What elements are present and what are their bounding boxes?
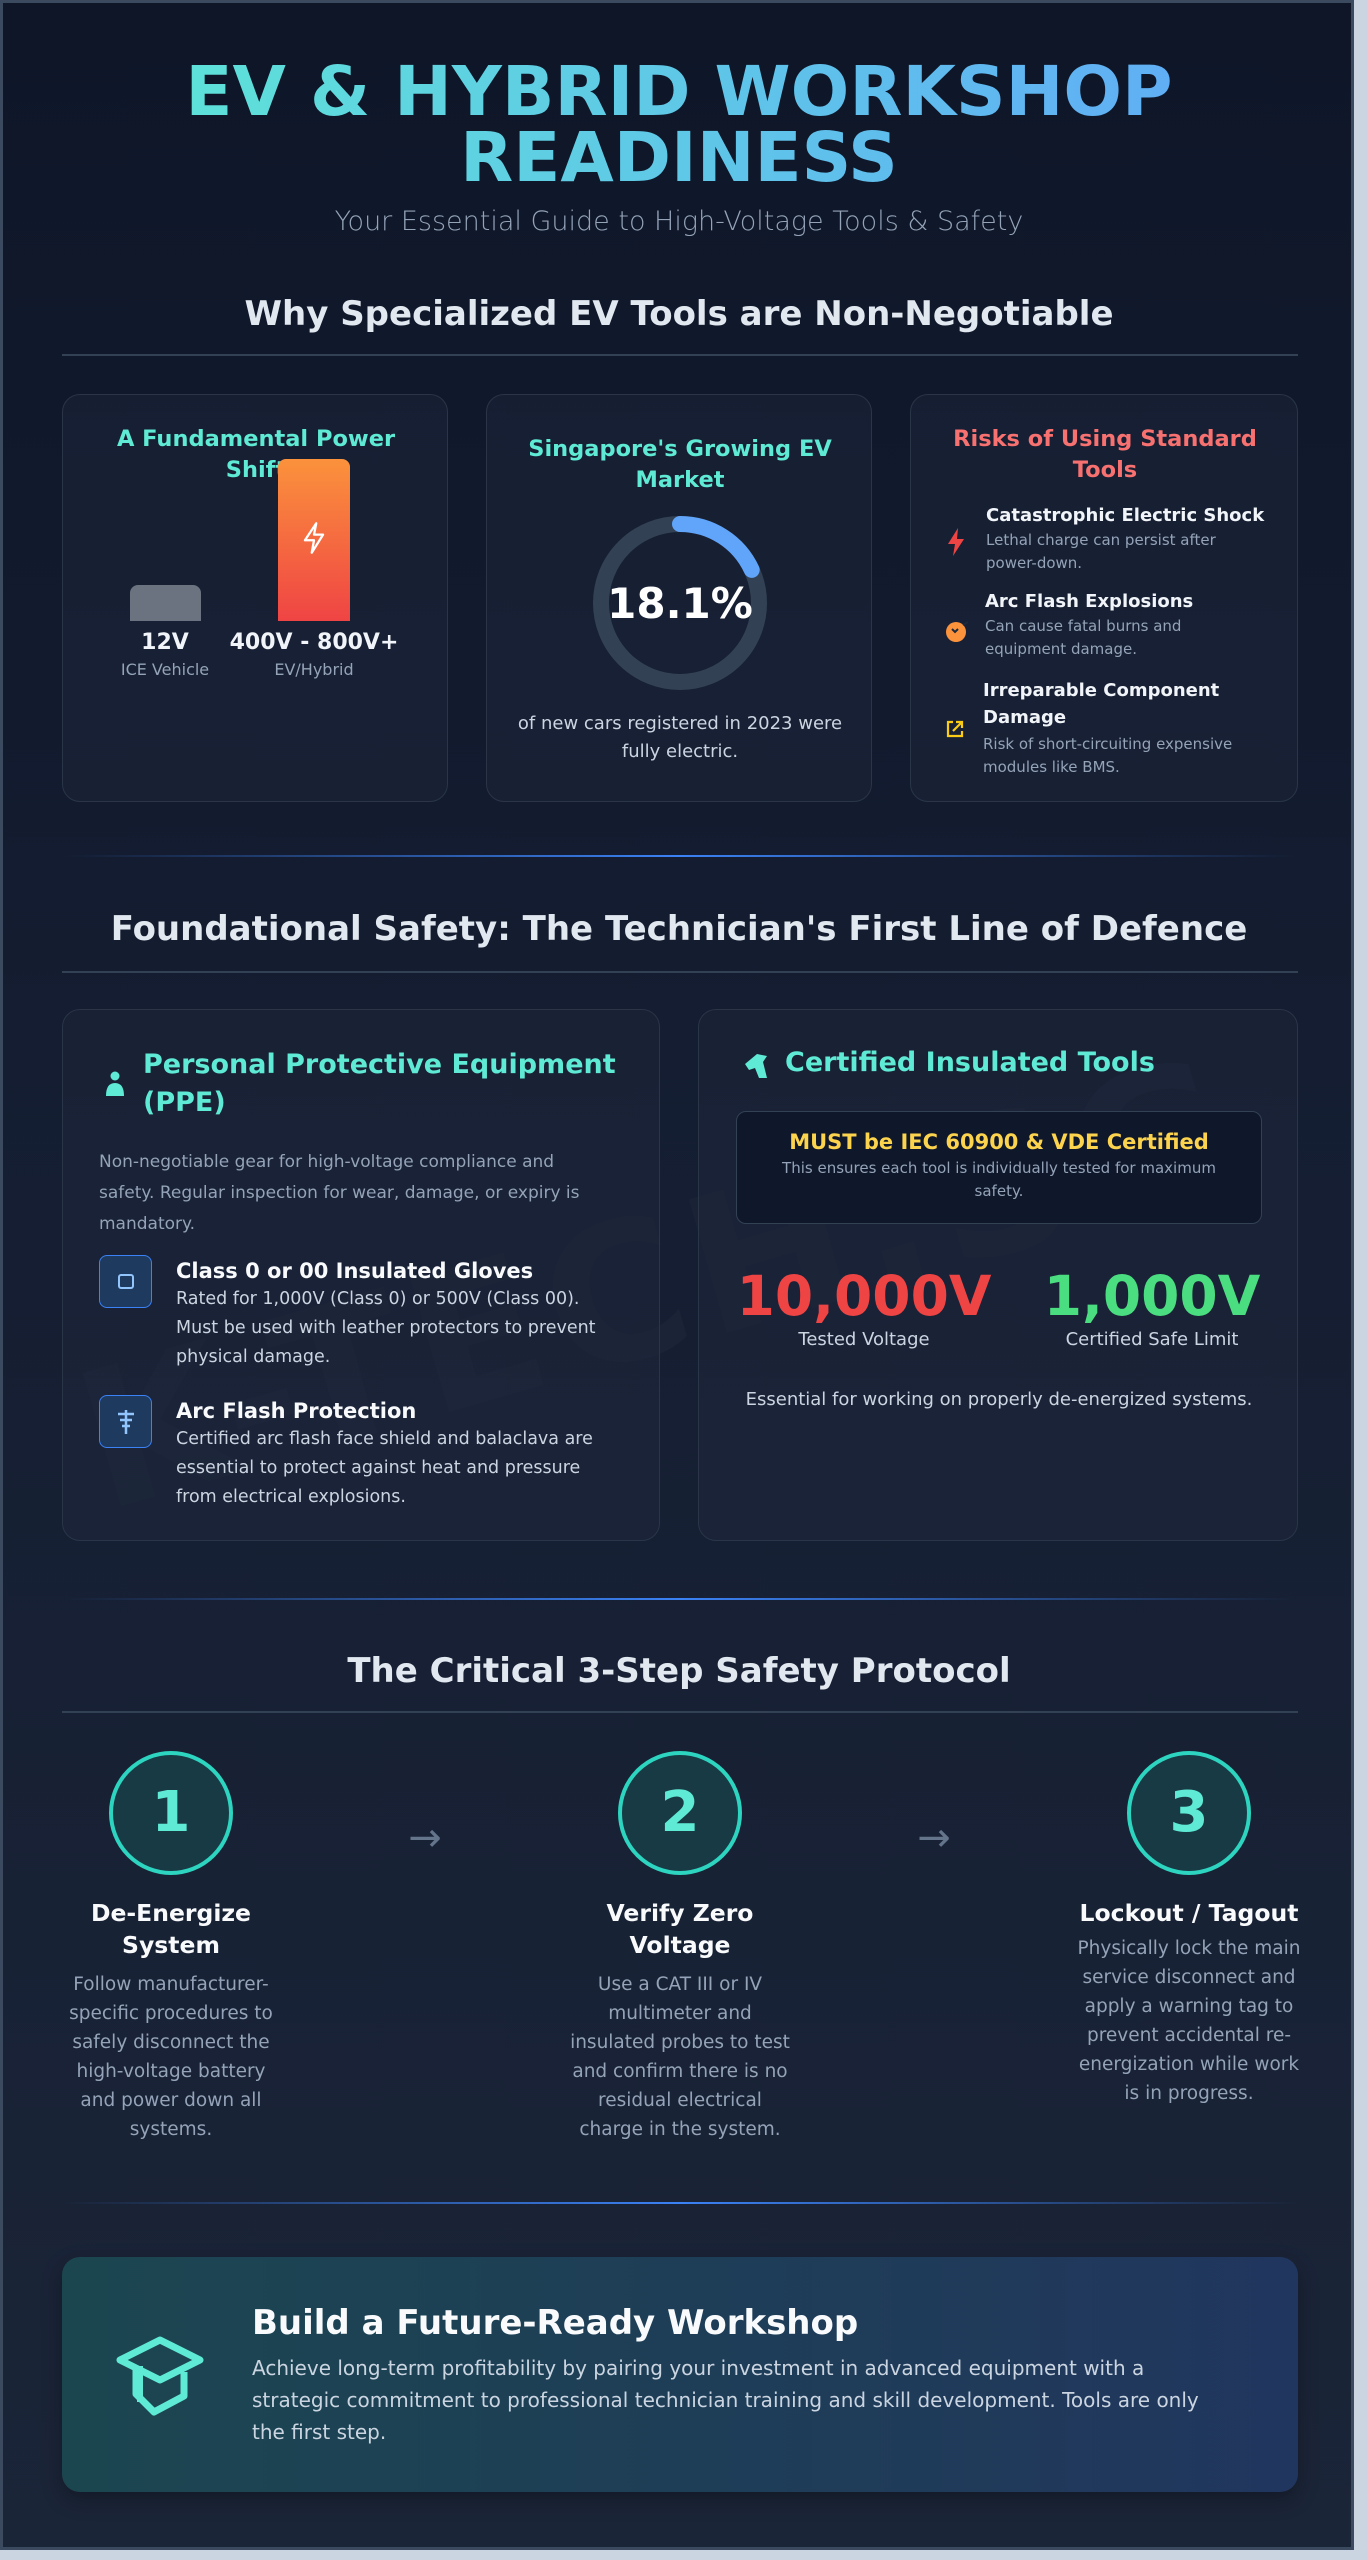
risk: shock — [948, 505, 1264, 572]
item: gloves: physical damage. — [176, 1347, 330, 1367]
icon: tool — [745, 1054, 767, 1078]
panel: risks: Risk of short-circuiting expensive — [983, 735, 1232, 753]
circle 1: 1 — [152, 1780, 190, 1845]
panel title: Personal Protective Equipment — [143, 1049, 616, 1080]
step 3 — [1078, 1751, 1300, 2104]
banner title: Build a Future-Ready Workshop — [252, 2303, 858, 2343]
title: EV & HYBRID WORKSHOP — [185, 52, 1173, 132]
circle 2: 2 — [661, 1780, 699, 1845]
watermark: K-TECH.SG — [56, 1013, 1265, 1554]
panel: risks — [910, 394, 1298, 802]
banner text: the first step. — [252, 2420, 386, 2444]
icon: person — [106, 1072, 124, 1096]
heading: why: Why Specialized EV Tools are Non-Negotiable — [244, 294, 1114, 334]
label 12V: ICE Vehicle — [121, 660, 209, 679]
intro text: mandatory. — [99, 1214, 195, 1234]
step 1: System — [122, 1931, 220, 1959]
panel title: (PPE) — [143, 1087, 226, 1118]
step 1 — [69, 1751, 273, 2140]
panel: risks: Can cause fatal burns and — [985, 617, 1181, 635]
banner text — [252, 2356, 1199, 2444]
item: arc flash: Arc Flash Protection — [176, 1399, 416, 1423]
item: arc flash: Certified arc flash face shield and balaclava are — [176, 1429, 593, 1449]
donut chart: 18.1% — [607, 579, 753, 628]
panel title — [528, 436, 832, 493]
panel: risks: Irreparable Component — [983, 680, 1219, 701]
panel title: Singapore's Growing EV — [528, 436, 832, 462]
panel title: Market — [635, 467, 725, 493]
panel: risks: Damage — [983, 707, 1066, 728]
label 12V: 12V — [141, 630, 189, 655]
panel: PPE — [62, 1009, 660, 1541]
step 1: Follow manufacturer-specific procedures to safely disconnect the high-voltage battery and power down all systems. — [69, 1974, 273, 2140]
bar: 400V — [278, 459, 350, 621]
icon: graduation cap — [116, 2336, 204, 2416]
label 400V: EV/Hybrid — [274, 660, 354, 679]
label 400V: 400V - 800V+ — [230, 630, 398, 655]
circle 1 — [109, 1751, 233, 1875]
circle 2 — [618, 1751, 742, 1875]
panel: risks: modules like BMS. — [983, 758, 1120, 776]
title: READINESS — [460, 118, 898, 198]
item: arc flash: from electrical explosions. — [176, 1487, 406, 1507]
panel: risks: Lethal charge can persist after — [986, 531, 1216, 549]
caption — [518, 713, 842, 762]
panel: insulated tools — [698, 1009, 1298, 1541]
icon: shield — [99, 1395, 152, 1448]
panel: risks: Arc Flash Explosions — [985, 591, 1193, 612]
intro text — [99, 1152, 580, 1234]
bar: 12V — [130, 585, 201, 621]
heading: protocol: The Critical 3-Step Safety Protocol — [347, 1651, 1011, 1691]
caption: fully electric. — [622, 741, 738, 762]
panel title — [143, 1049, 616, 1118]
banner text: strategic commitment to professional technician training and skill development. Tools are only — [252, 2388, 1199, 2412]
label 12V — [121, 630, 209, 679]
step 2: Voltage — [630, 1931, 730, 1959]
banner: future-ready — [62, 2257, 1298, 2492]
item: arc flash: essential to protect against heat and pressure — [176, 1458, 580, 1478]
panel title — [953, 426, 1257, 483]
heading: foundational: Foundational Safety: The Technician's First Line of Defence — [111, 909, 1247, 949]
step 2: Use a CAT III or IV multimeter and insulated probes to test and confirm there is no residual electrical charge in the system. — [570, 1974, 790, 2140]
banner text: Achieve long-term profitability by pairing your investment in advanced equipment with a — [252, 2356, 1144, 2380]
step 1: De-Energize — [91, 1899, 251, 1927]
panel: risks: power-down. — [986, 554, 1082, 572]
panel title — [117, 426, 396, 483]
callout: certification — [736, 1111, 1262, 1224]
callout: certification: This ensures each tool is individually tested for maximum — [782, 1159, 1216, 1177]
panel title: A Fundamental Power — [117, 426, 395, 452]
panel: power shift — [62, 394, 448, 802]
stat: tested voltage: 10,000V — [737, 1264, 991, 1328]
risk: arc flash — [946, 591, 1193, 658]
label 400V — [230, 630, 398, 679]
stat: safe limit: 1,000V — [1044, 1264, 1260, 1328]
panel: market — [486, 394, 872, 802]
panel title: Risks of Using Standard — [953, 426, 1257, 452]
item: gloves: Class 0 or 00 Insulated Gloves — [176, 1259, 533, 1283]
panel title: Tools — [1073, 457, 1137, 483]
arrow 1: → — [408, 1815, 442, 1861]
stat: safe limit: Certified Safe Limit — [1066, 1329, 1238, 1350]
step 3: Lockout / Tagout — [1080, 1899, 1298, 1927]
item: gloves: Rated for 1,000V (Class 0) or 500V (Class 00). — [176, 1289, 580, 1309]
title — [3, 59, 1355, 191]
step 2 — [570, 1751, 790, 2140]
step 2: Verify Zero — [607, 1899, 753, 1927]
circle 3: 3 — [1170, 1780, 1208, 1845]
intro text: safety. Regular inspection for wear, damage, or expiry is — [99, 1183, 580, 1203]
item: gloves — [99, 1255, 596, 1367]
panel: risks: Catastrophic Electric Shock — [986, 505, 1264, 526]
stat: tested voltage: Tested Voltage — [798, 1329, 930, 1350]
callout: certification: MUST be IEC 60900 & VDE Certified — [789, 1130, 1209, 1154]
item: gloves: Must be used with leather protectors to prevent — [176, 1318, 596, 1338]
arrow 2: → — [917, 1815, 951, 1861]
donut chart — [593, 516, 767, 690]
item: arc flash — [99, 1395, 593, 1507]
intro text: Non-negotiable gear for high-voltage compliance and — [99, 1152, 554, 1172]
icon: glove — [99, 1255, 152, 1308]
note: Essential for working on properly de-energized systems. — [746, 1389, 1252, 1410]
risk: component damage — [946, 680, 1232, 776]
panel title: Shift — [226, 457, 286, 483]
panel: risks: equipment damage. — [985, 640, 1137, 658]
step 3: Physically lock the main service disconnect and apply a warning tag to prevent accidental re-energization while work is in progress. — [1078, 1938, 1300, 2104]
panel title: Certified Insulated Tools — [785, 1047, 1155, 1078]
callout: certification: safety. — [975, 1182, 1023, 1200]
subtitle: Your Essential Guide to High-Voltage Tools & Safety — [335, 206, 1023, 237]
caption: of new cars registered in 2023 were — [518, 713, 842, 734]
circle 3 — [1127, 1751, 1251, 1875]
